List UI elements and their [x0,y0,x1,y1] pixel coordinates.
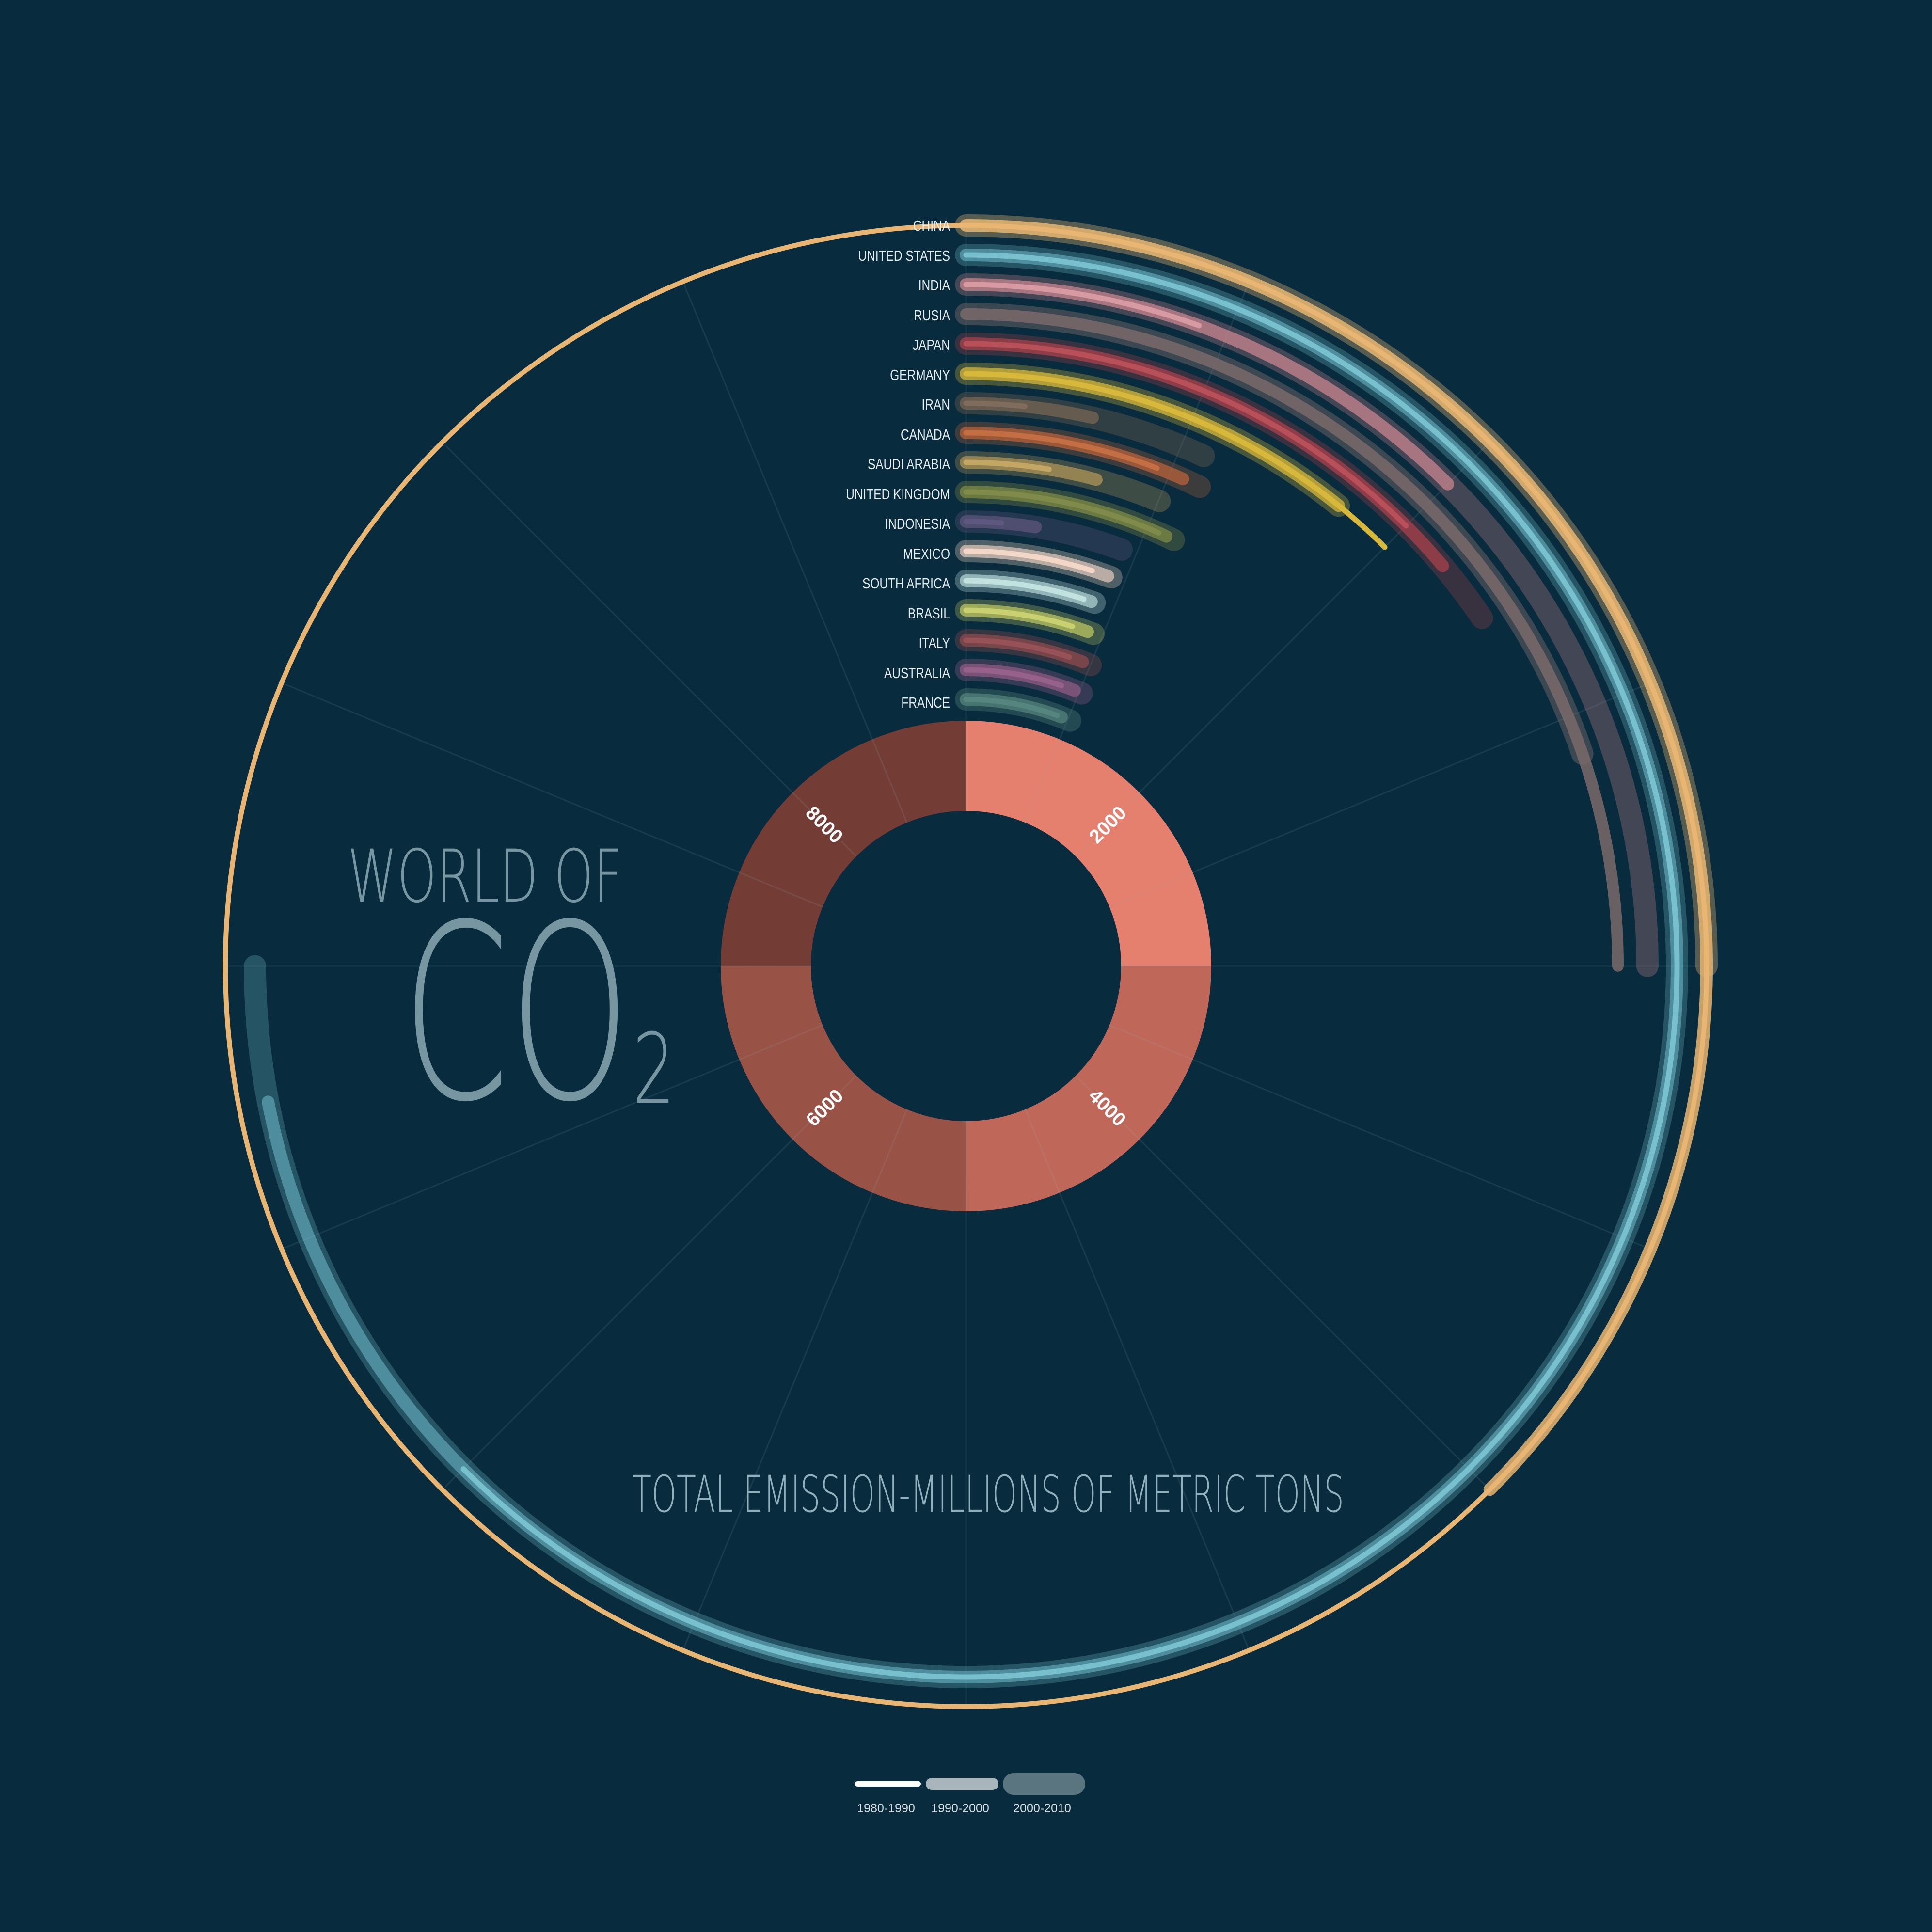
arc: Rusia [314,314,1618,1618]
arc: Iran [403,403,1529,1529]
country labels: BRASIL [908,605,950,622]
donut scale labels: 2000 [1085,802,1131,848]
arc: Mexico [551,551,1381,1381]
arc: United States [255,255,1677,1677]
arc: Italy [640,640,1292,1292]
country labels: RUSIA [914,307,950,324]
legend: 1980-1990 [857,1802,915,1815]
donut scale labels: 8000 [801,802,847,848]
donut scale labels: 6000 [802,1085,848,1131]
country labels: IRAN [922,396,950,413]
country labels: FRANCE [901,694,950,711]
arc: Brasil [610,610,1322,1322]
country labels: SAUDI ARABIA [868,456,950,473]
country labels: SOUTH AFRICA [862,575,950,592]
arc: Germany [374,374,1558,1558]
legend [855,1773,1085,1815]
country labels [846,217,950,711]
arc: France [699,699,1233,1233]
arc: Saudi Arabia [462,462,1470,1470]
country labels: UNITED KINGDOM [846,486,950,503]
donut scale labels [801,802,1131,1131]
arc: Australia [670,670,1262,1262]
title: CO [402,873,630,1155]
country labels: CHINA [913,217,950,234]
legend: 1990-2000 [931,1802,989,1815]
country emission arcs [225,225,1707,1707]
arc: Japan [344,344,1588,1588]
arc: United Kingdom [492,492,1440,1440]
arc: South Africa [581,581,1351,1351]
donut scale labels: 4000 [1084,1085,1130,1131]
country labels: INDONESIA [885,515,950,532]
arc: Canada [433,433,1499,1499]
title: 2 [633,1013,675,1126]
legend: 2000-2010 [1013,1802,1071,1815]
arc: China [225,225,1707,1707]
title: WORLD OF [348,835,622,919]
arc: India [285,285,1647,1647]
country labels: GERMANY [890,366,950,383]
country labels: JAPAN [913,336,950,353]
country labels: ITALY [919,634,950,651]
donut chart: total emission scale [766,766,1166,1166]
country labels: UNITED STATES [858,247,950,264]
arc: Indonesia [522,522,1410,1410]
country labels: INDIA [918,277,950,294]
country labels: CANADA [901,426,950,443]
country labels: MEXICO [903,545,950,562]
country labels: AUSTRALIA [884,665,950,681]
title [348,835,675,1155]
subtitle: TOTAL EMISSION-MILLIONS OF METRIC TONS [632,1465,1344,1524]
